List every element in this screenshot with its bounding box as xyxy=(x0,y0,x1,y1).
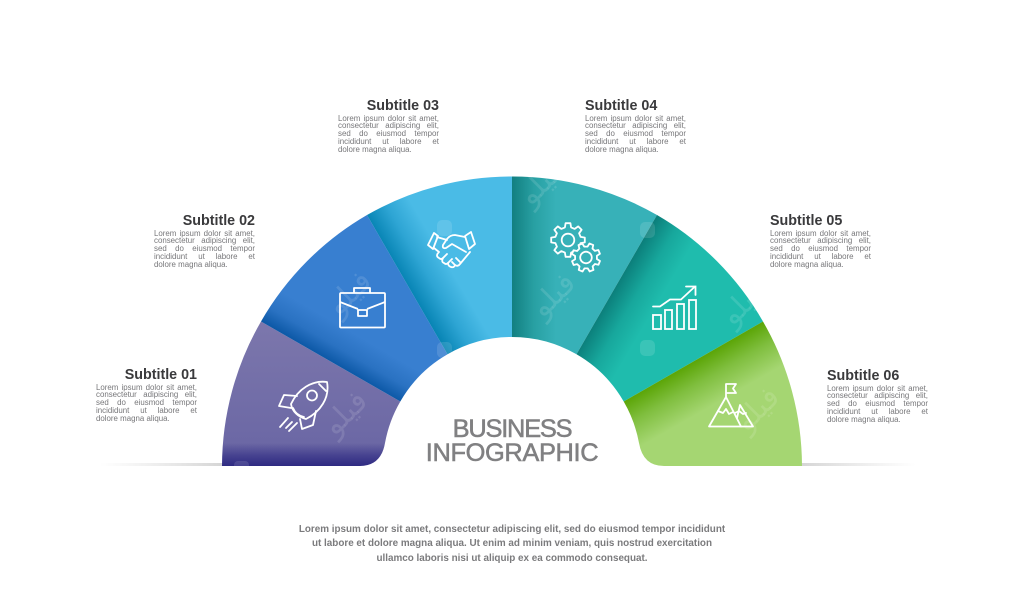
small gear xyxy=(567,239,605,276)
block: subtitle 04: sed do eiusmod tempor xyxy=(585,129,686,138)
block: subtitle 04 xyxy=(585,98,686,154)
block: subtitle 05 xyxy=(770,212,871,269)
block: subtitle 02: Subtitle 02 xyxy=(183,212,255,228)
block: subtitle 03: sed do eiusmod tempor xyxy=(338,129,439,138)
block: subtitle 06: dolore magna aliqua. xyxy=(827,415,901,424)
block: subtitle 02: sed do eiusmod tempor xyxy=(154,244,255,253)
block: subtitle 04: dolore magna aliqua. xyxy=(585,145,659,154)
block: subtitle 02: incididunt ut labore et xyxy=(154,252,255,261)
block: subtitle 06: sed do eiusmod tempor xyxy=(827,399,928,408)
semicircle infographic: فيلو xyxy=(510,154,571,214)
block: subtitle 05: Subtitle 05 xyxy=(770,212,842,228)
footer text: Lorem ipsum dolor sit amet, consectetur adipiscing elit, sed do eiusmod tempor incididunt xyxy=(299,524,725,534)
footer text: ullamco laboris nisi ut aliquip ex ea commodo consequat. xyxy=(376,552,648,564)
block: subtitle 04: Subtitle 04 xyxy=(585,98,657,114)
block: subtitle 06: incididunt ut labore et xyxy=(827,407,928,416)
semicircle infographic: فيلو xyxy=(314,384,375,444)
segment 2: blue xyxy=(261,215,448,402)
block: subtitle 04: consectetur adipiscing elit, xyxy=(585,121,686,130)
block: subtitle 03 xyxy=(338,98,439,154)
icon: gears xyxy=(551,223,605,276)
block: subtitle 02: dolore magna aliqua. xyxy=(154,260,228,269)
block: subtitle 01: consectetur adipiscing elit, xyxy=(96,390,197,399)
semicircle infographic: فيلو xyxy=(318,264,379,324)
title: BUSINESS xyxy=(453,415,571,443)
block: subtitle 05: sed do eiusmod tempor xyxy=(770,244,871,253)
block: subtitle 03: consectetur adipiscing elit, xyxy=(338,121,439,130)
big gear xyxy=(551,223,585,257)
block: subtitle 03: Subtitle 03 xyxy=(367,98,439,114)
icon: briefcase xyxy=(340,288,385,328)
title xyxy=(426,415,598,467)
icon: rocket xyxy=(279,382,328,431)
segment 5: green teal xyxy=(576,215,763,402)
block: subtitle 05: consectetur adipiscing elit, xyxy=(770,236,871,245)
segment 6: green xyxy=(624,322,802,466)
block: subtitle 02 xyxy=(154,212,255,269)
block: subtitle 02: consectetur adipiscing elit, xyxy=(154,236,255,245)
block: subtitle 03: Lorem ipsum dolor sit amet, xyxy=(338,114,439,122)
semicircle infographic: فيلو xyxy=(712,274,773,334)
semicircle infographic xyxy=(128,176,890,466)
block: subtitle 05: incididunt ut labore et xyxy=(770,252,871,261)
block: subtitle 01: sed do eiusmod tempor xyxy=(96,398,197,407)
block: subtitle 03: dolore magna aliqua. xyxy=(338,145,412,154)
icon: mountain with flag xyxy=(709,384,753,426)
icon: handshake xyxy=(428,232,475,267)
block: subtitle 01: dolore magna aliqua. xyxy=(96,414,170,423)
block: subtitle 06: consectetur adipiscing elit, xyxy=(827,391,928,400)
segment 3: light blue xyxy=(367,176,512,354)
block: subtitle 06: Lorem ipsum dolor sit amet, xyxy=(827,384,928,392)
ground shadow left xyxy=(100,463,223,466)
footer text: ut labore et dolore magna aliqua. Ut enim ad minim veniam, quis nostrud exercitation xyxy=(312,538,712,549)
block: subtitle 01: incididunt ut labore et xyxy=(96,406,197,415)
block: subtitle 02: Lorem ipsum dolor sit amet, xyxy=(154,228,255,238)
ground shadow right xyxy=(801,463,916,466)
block: subtitle 05: Lorem ipsum dolor sit amet, xyxy=(770,228,871,238)
semicircle infographic: فيلو xyxy=(726,380,787,440)
block: subtitle 01: Lorem ipsum dolor sit amet, xyxy=(96,382,197,392)
block: subtitle 03: incididunt ut labore et xyxy=(338,137,439,146)
block: subtitle 01: Subtitle 01 xyxy=(125,366,197,382)
block: subtitle 05: dolore magna aliqua. xyxy=(770,260,844,269)
segment 1: purple xyxy=(222,322,400,466)
block: subtitle 01 xyxy=(96,366,197,423)
block: subtitle 04: incididunt ut labore et xyxy=(585,137,686,146)
semicircle infographic: فيلو xyxy=(522,266,583,326)
segment 4: teal xyxy=(512,176,657,354)
title: INFOGRAPHIC xyxy=(426,439,598,467)
footer text xyxy=(299,524,726,564)
block: subtitle 06: Subtitle 06 xyxy=(827,368,899,384)
block: subtitle 06 xyxy=(827,368,928,424)
icon: growth chart xyxy=(653,286,696,329)
block: subtitle 04: Lorem ipsum dolor sit amet, xyxy=(585,114,686,122)
